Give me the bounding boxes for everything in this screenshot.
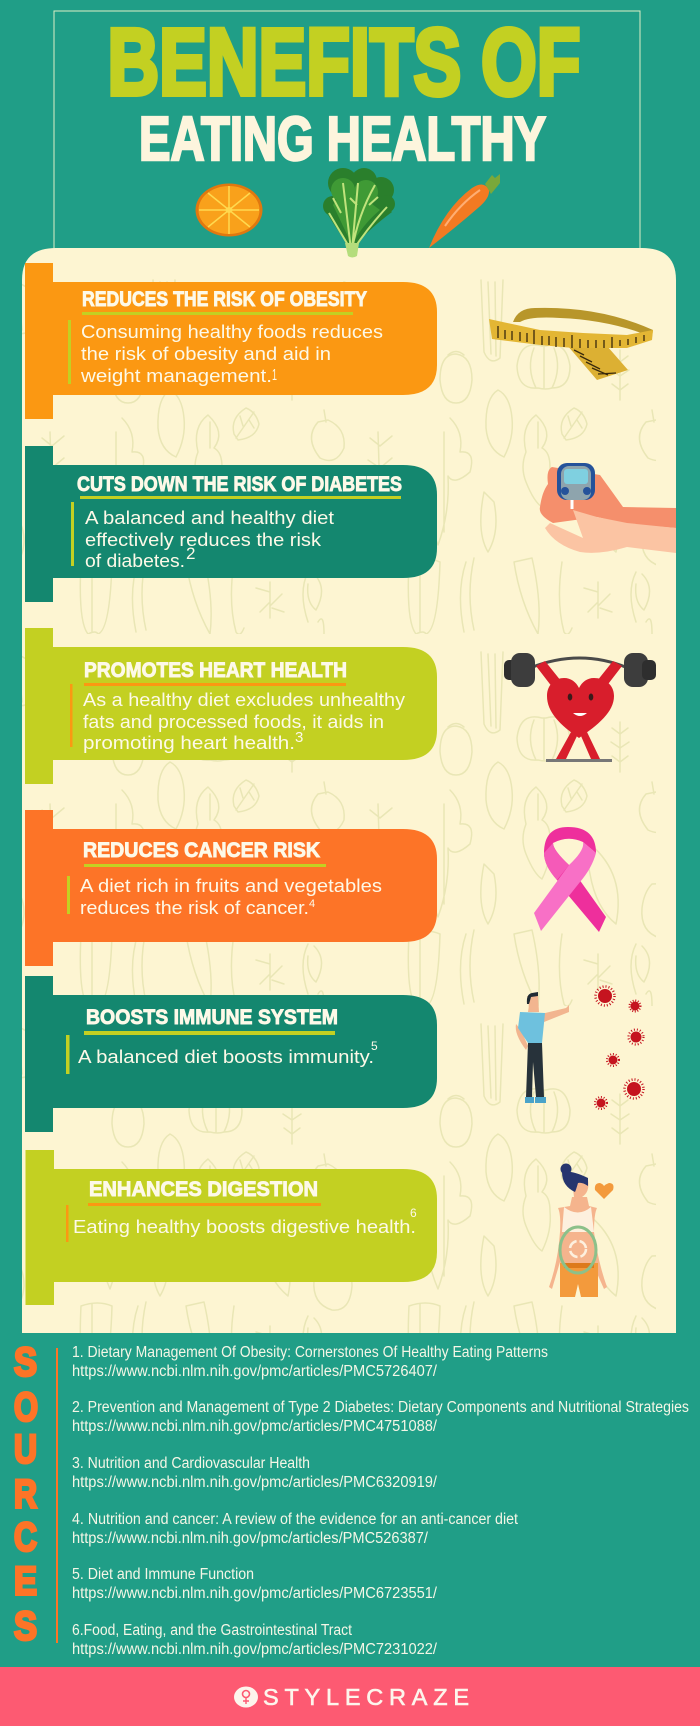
body text: effectively reduces the risk	[85, 529, 322, 550]
sources list: https://www.ncbi.nlm.nih.gov/pmc/articles/PMC4751088/	[72, 1418, 438, 1435]
sources list: 1. Dietary Management Of Obesity: Cornerstones Of Healthy Eating Patterns	[72, 1344, 548, 1361]
body text: A balanced diet boosts immunity.	[78, 1046, 374, 1067]
icon: lettuce	[323, 168, 395, 258]
heading: PROMOTES HEART HEALTH	[84, 659, 347, 682]
sources vertical heading: R	[14, 1472, 37, 1516]
sources vertical heading: S	[14, 1604, 37, 1648]
sources list: https://www.ncbi.nlm.nih.gov/pmc/articles/PMC526387/	[72, 1530, 429, 1547]
sources list: https://www.ncbi.nlm.nih.gov/pmc/articles/PMC7231022/	[72, 1641, 438, 1658]
sources list: https://www.ncbi.nlm.nih.gov/pmc/articles/PMC6320919/	[72, 1474, 438, 1491]
underline	[80, 496, 401, 499]
accent bar	[66, 1035, 70, 1074]
sources divider	[56, 1348, 58, 1643]
sources list: 4. Nutrition and cancer: A review of the evidence for an anti-cancer diet	[72, 1511, 519, 1528]
sources list: https://www.ncbi.nlm.nih.gov/pmc/articles/PMC5726407/	[72, 1363, 438, 1380]
tab and pill	[25, 628, 437, 784]
heading: ENHANCES DIGESTION	[89, 1178, 318, 1201]
accent bar	[66, 1205, 68, 1242]
panel: cuts down the risk of diabetes	[25, 446, 437, 602]
body text: 5	[371, 1039, 378, 1053]
underline	[88, 1203, 321, 1206]
brand name: STYLECRAZE	[263, 1684, 469, 1710]
sources vertical heading: S	[14, 1340, 37, 1384]
icon: stylecraze logo	[234, 1686, 258, 1708]
sources vertical heading: E	[14, 1560, 37, 1604]
body text: A diet rich in fruits and vegetables	[80, 875, 382, 896]
tab and pill	[25, 976, 437, 1132]
body text: A balanced and healthy diet	[85, 507, 334, 528]
sources list: 5. Diet and Immune Function	[72, 1566, 254, 1583]
icon: heart lifting barbell	[504, 653, 656, 762]
icon: pink ribbon	[534, 827, 606, 932]
body text: Eating healthy boosts digestive health.	[73, 1216, 416, 1237]
tab and pill	[25, 263, 437, 419]
icon: measuring tape	[489, 308, 653, 380]
tab and pill	[25, 446, 437, 602]
icon: carrot	[429, 174, 500, 248]
panel: enhances digestion	[26, 1150, 437, 1305]
body text: 6	[410, 1206, 417, 1220]
sources list: 3. Nutrition and Cardiovascular Health	[72, 1455, 310, 1472]
underline	[84, 864, 326, 867]
icon: hand with glucose meter	[540, 463, 676, 553]
panel: boosts immune system	[25, 976, 437, 1132]
sources vertical heading	[14, 1340, 38, 1648]
underline	[82, 312, 353, 315]
accent bar	[67, 876, 70, 914]
body text	[80, 321, 383, 386]
body text: 3	[295, 729, 303, 746]
accent bar	[71, 502, 74, 566]
body text: 2	[186, 544, 195, 563]
sources list: 6.Food, Eating, and the Gastrointestinal Tract	[72, 1622, 353, 1639]
heading: REDUCES CANCER RISK	[83, 839, 320, 862]
icon: woman with digestive system	[549, 1164, 614, 1297]
sources list	[72, 1344, 689, 1658]
body text: As a healthy diet excludes unhealthy	[83, 689, 406, 710]
sources vertical heading: C	[14, 1516, 37, 1560]
icon: orange slice	[196, 184, 262, 236]
man	[516, 992, 569, 1103]
heading: BOOSTS IMMUNE SYSTEM	[86, 1006, 338, 1029]
tab and pill	[25, 810, 437, 966]
body text	[78, 1039, 378, 1067]
body text: 1	[272, 367, 277, 384]
icon: man and viruses	[516, 986, 644, 1109]
sources list: https://www.ncbi.nlm.nih.gov/pmc/articles/PMC6723551/	[72, 1585, 438, 1602]
sources vertical heading: U	[14, 1428, 37, 1472]
panel: promotes heart health	[25, 628, 437, 784]
accent bar	[68, 320, 71, 384]
body text	[83, 689, 406, 753]
footer band	[0, 1667, 700, 1726]
body text: of diabetes.	[85, 550, 185, 571]
heading: CUTS DOWN THE RISK OF DIABETES	[77, 473, 402, 496]
body text	[85, 507, 334, 571]
title line 2: EATING HEALTHY	[139, 105, 546, 174]
underline	[84, 1031, 335, 1035]
body text: 4	[309, 898, 315, 910]
accent bar	[70, 684, 72, 747]
body text: reduces the risk of cancer.	[80, 897, 309, 918]
body text: the risk of obesity and aid in	[81, 343, 331, 364]
panel: reduces the risk of obesity	[25, 263, 437, 419]
sources vertical heading: O	[14, 1386, 38, 1430]
body text: Consuming healthy foods reduces	[81, 321, 383, 342]
title frame	[54, 11, 640, 250]
main cream panel	[22, 248, 676, 1333]
body text: fats and processed foods, it aids in	[83, 711, 384, 732]
body text: promoting heart health.	[83, 732, 295, 753]
panel: reduces cancer risk	[25, 810, 437, 966]
heading: REDUCES THE RISK OF OBESITY	[82, 288, 367, 311]
title	[108, 10, 580, 174]
underline	[84, 683, 346, 686]
tab and pill	[26, 1150, 437, 1305]
viruses	[595, 986, 644, 1109]
body text	[73, 1206, 417, 1237]
body text	[80, 875, 382, 918]
body text: weight management.	[80, 365, 272, 386]
